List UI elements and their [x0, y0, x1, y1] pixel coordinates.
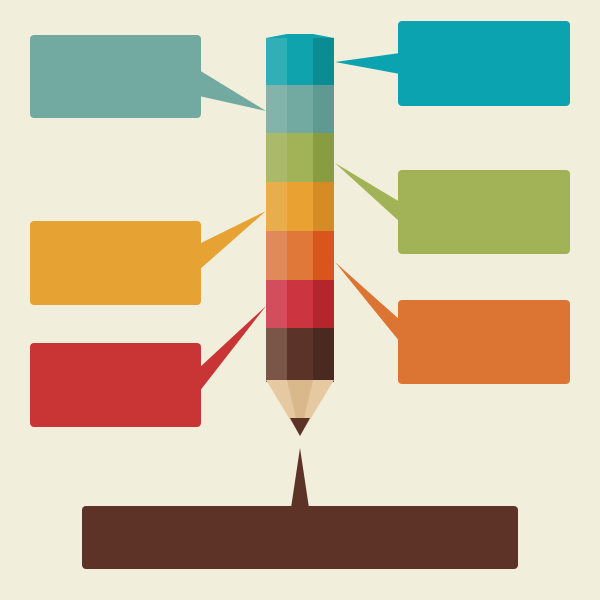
callout: bottom brown	[82, 448, 518, 569]
callout: top-right	[335, 21, 570, 106]
callout: left red	[30, 306, 266, 427]
callout: right green	[335, 163, 570, 254]
callout: right orange	[335, 262, 570, 384]
callout: top-left	[30, 35, 266, 118]
callout: left orange-yellow	[30, 211, 266, 305]
pencil	[266, 34, 334, 436]
